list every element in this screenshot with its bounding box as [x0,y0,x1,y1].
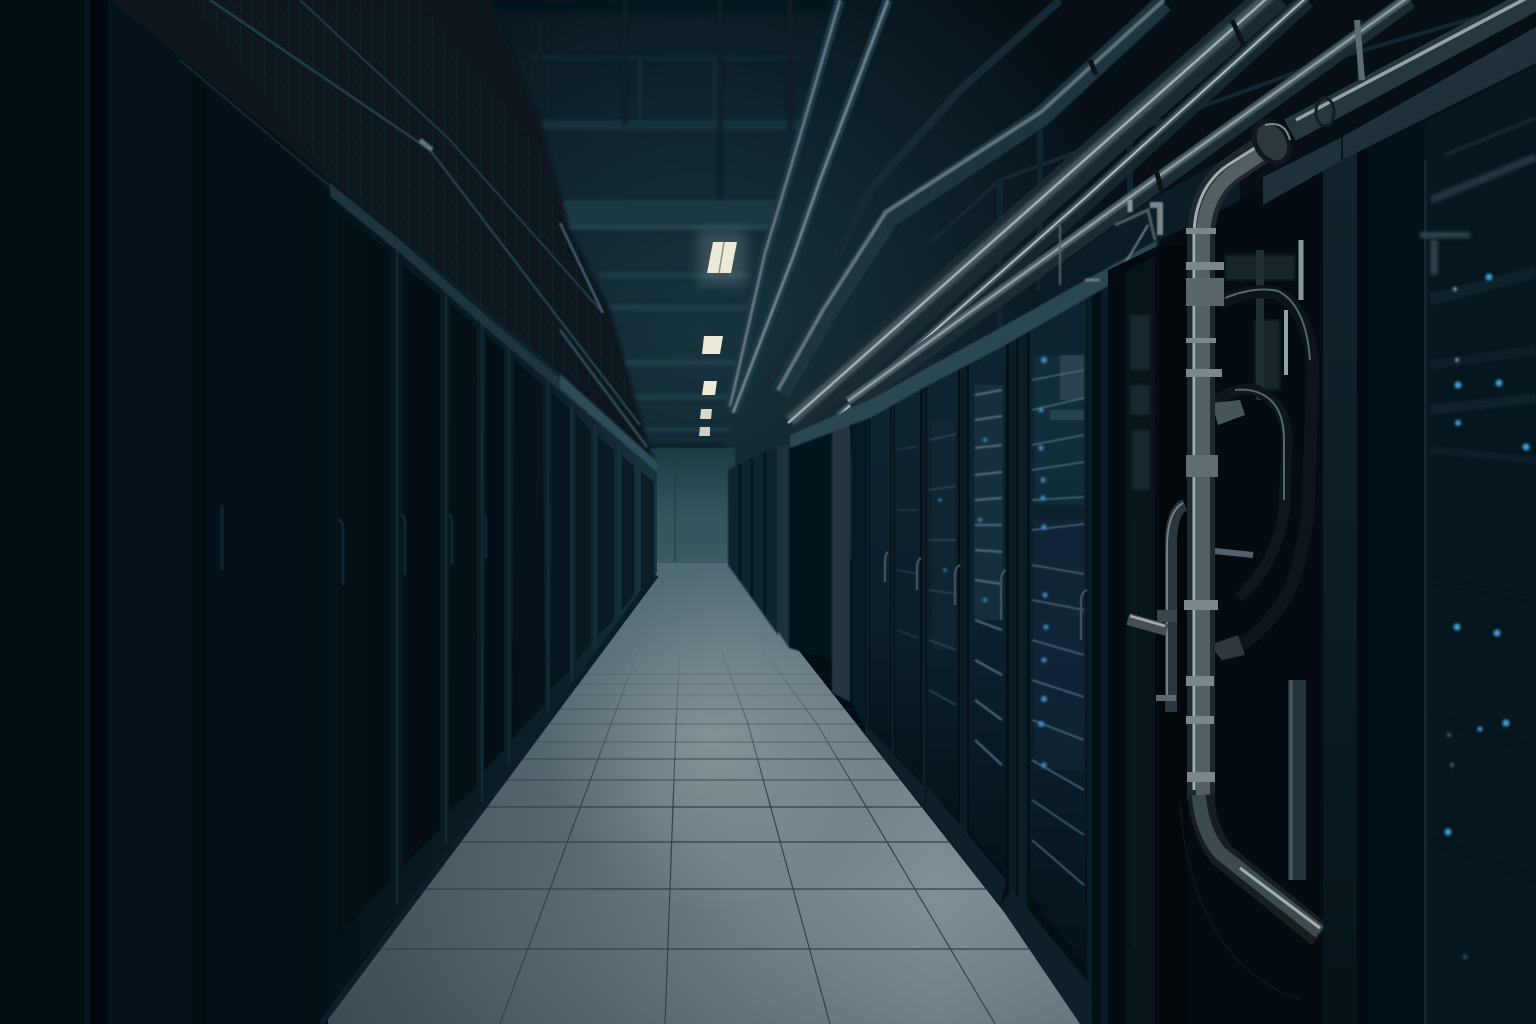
light 4 [700,409,712,419]
far right racks [728,425,850,702]
ceiling [0,0,1536,560]
right server racks [850,250,1160,1024]
rack glass partial [1126,256,1155,1024]
secondary pipe [1128,503,1253,712]
tile grid lines [364,674,1035,949]
server shelf lines [897,370,1084,885]
rack door mesh panels [108,0,654,1024]
pipe C [848,0,1410,405]
mesh texture [108,0,477,1024]
rack plinth [1000,890,1092,1024]
rack door 2 [969,336,1006,875]
pipe couplings [1184,228,1224,782]
beam structure behind pipes [1000,20,1360,330]
background pipes in bay [1134,240,1301,1000]
clamps [1156,20,1244,192]
ceiling beams [490,0,830,449]
left server racks [0,0,657,1024]
rail brackets [1060,200,1160,285]
pipe B [838,0,1307,420]
black hoses [1210,290,1313,660]
door stile lines [397,244,638,905]
far wall [650,448,735,564]
shelf bands [1420,118,1536,880]
rack door 3 [927,364,958,825]
light 3 [702,381,717,395]
rack door 5 [870,405,890,752]
baseboard shadow [321,575,656,1024]
light 5 [699,427,710,436]
rack posts near camera [0,0,205,1024]
main coolant pipe [1194,115,1320,935]
left cable tray [110,0,657,462]
right rail above racks [790,200,1160,448]
overhead pipes centre [730,0,1536,413]
mottled reflections [1130,255,1295,490]
rack door 6 [852,418,865,728]
status LEDs [938,357,1048,768]
door handles [885,552,1087,640]
left top rail [330,183,657,472]
blue status LEDs [1444,274,1530,960]
rack posts [866,280,1108,1024]
pipe A [788,0,1276,425]
door handles [222,505,486,585]
right near rack [1323,63,1536,1024]
light 2 [702,336,723,354]
liquid cooling bay [1108,115,1323,1024]
floor [321,563,1092,1024]
rack door 4 [895,389,920,785]
pipe D [1290,0,1536,130]
right top beam [1263,27,1536,205]
server block texture [932,355,1084,770]
light 1 [707,242,737,273]
ceiling lights [698,230,746,436]
rack door 1 [1030,292,1086,965]
right overhead pipes [788,0,1536,425]
